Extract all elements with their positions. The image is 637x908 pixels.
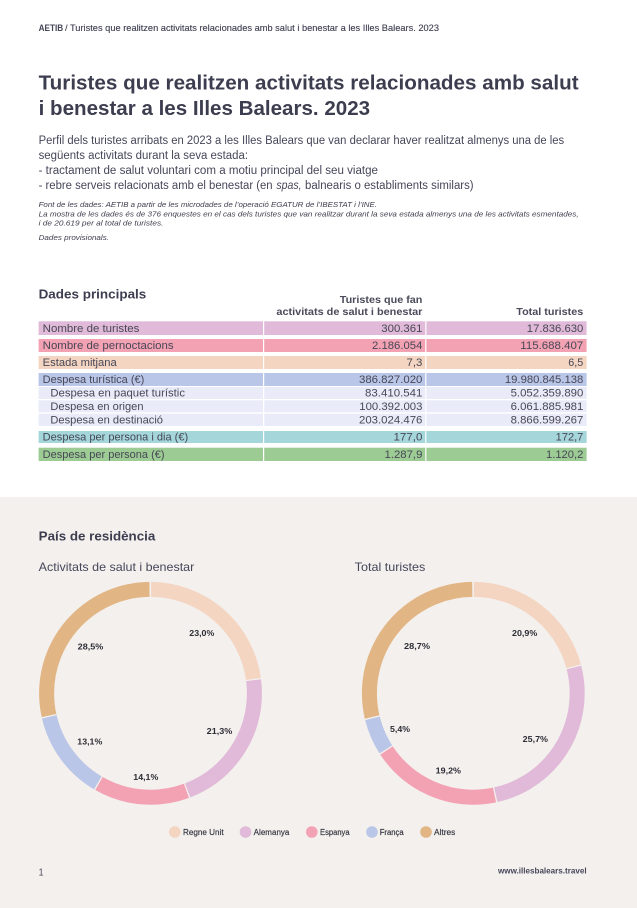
header breadcrumb: AETIB <box>39 23 64 33</box>
table: dades principals <box>39 286 587 461</box>
donut chart: total turistes: 25,7% <box>523 735 549 744</box>
donut chart: activitats de salut i benestar: 14,1% <box>133 773 159 782</box>
row: nombre de pernoctacions: 2.186.054 <box>372 340 422 352</box>
section heading: País de residència <box>39 529 156 544</box>
row: despesa per persona: 1.287,9 <box>384 449 422 461</box>
row: despesa turística: Despesa turística (€) <box>43 374 144 386</box>
intro paragraph: balnearis o establiments similars) <box>305 180 474 192</box>
source note <box>39 200 579 242</box>
row: estada mitjana: 6,5 <box>568 357 583 369</box>
row: despesa turística <box>39 373 587 386</box>
column header: health and wellness tourists: activitats de salut i benestar <box>276 307 422 318</box>
legend <box>169 826 455 838</box>
panel: país de residència <box>0 497 637 908</box>
donut chart: activitats de salut i benestar: 21,3% <box>207 727 233 736</box>
row: despesa en destinació: Despesa en destinació <box>50 415 163 427</box>
row: despesa en origen: 6.061.885.981 <box>511 401 583 413</box>
intro paragraph: - tractament de salut voluntari com a motiu principal del seu viatge <box>39 165 378 177</box>
row: nombre de pernoctacions: Nombre de pernoctacions <box>43 340 174 352</box>
row: despesa en origen: 100.392.003 <box>359 401 423 413</box>
title <box>39 72 579 120</box>
legend: Regne Unit <box>183 828 224 837</box>
row: despesa turística: 19.980.845.138 <box>505 374 583 386</box>
donut chart: activitats de salut i benestar: 23,0% <box>189 629 215 638</box>
intro paragraph: següents activitats durant la seva estada: <box>39 150 248 162</box>
website url: www.illesbalears.travel <box>497 866 587 875</box>
chart title: total turistes: Total turistes <box>355 560 425 574</box>
source note: La mostra de les dades és de 376 enquestes en el cas dels turistes que van realitzar durant la seva estada almenys una de les activitats esmentades, <box>39 209 579 218</box>
row: despesa en paquet turístic: Despesa en paquet turístic <box>50 388 186 400</box>
row: despesa per persona i dia: Despesa per persona i dia (€) <box>43 432 188 444</box>
source note: i de 20.619 per al total de turistes. <box>39 218 163 227</box>
source note: Font de les dades: AETIB a partir de les microdades de l’operació EGATUR de l’IBESTAT i l’INE. <box>39 200 377 209</box>
row: nombre de turistes: 17.836.630 <box>527 323 583 335</box>
donut chart: total turistes: 20,9% <box>512 629 538 638</box>
donut chart: total turistes: 28,7% <box>404 642 431 651</box>
title: Turistes que realitzen activitats relacionades amb salut <box>39 72 579 94</box>
column header: health and wellness tourists: Turistes que fan <box>340 295 422 306</box>
row: despesa turística: 386.827.020 <box>359 374 422 386</box>
intro paragraph: - rebre serveis relacionats amb el benestar (en <box>39 180 273 192</box>
header breadcrumb: / Turistes que realitzen activitats relacionades amb salut i benestar a les Illes Balears. 2023 <box>65 23 439 33</box>
title: i benestar a les Illes Balears. 2023 <box>39 97 370 120</box>
column header: total tourists: Total turistes <box>516 307 584 318</box>
donut chart: activitats de salut i benestar: 28,5% <box>78 642 104 651</box>
donut chart: activitats de salut i benestar: 13,1% <box>77 737 103 746</box>
row: despesa en paquet turístic <box>39 387 587 400</box>
donut chart: total turistes: 19,2% <box>436 766 462 775</box>
row: despesa en destinació: 8.866.599.267 <box>511 415 583 427</box>
row: despesa per persona i dia: 177,0 <box>394 432 422 444</box>
row: despesa en paquet turístic: 83.410.541 <box>365 388 423 400</box>
row: nombre de pernoctacions: 115.688.407 <box>520 340 583 352</box>
intro paragraph <box>39 135 564 192</box>
legend: Espanya <box>320 828 350 837</box>
row: nombre de turistes <box>39 321 587 335</box>
donut chart: activitats de salut i benestar <box>47 589 254 797</box>
row: despesa per persona: 1.120,2 <box>546 449 583 461</box>
row: despesa en destinació <box>39 414 587 427</box>
page number: 1 <box>39 868 44 879</box>
row: estada mitjana <box>39 356 587 369</box>
row: despesa en origen: Despesa en origen <box>50 401 144 413</box>
row: nombre de turistes: 300.361 <box>381 323 422 335</box>
legend: França <box>380 828 404 837</box>
legend: Altres <box>434 828 455 837</box>
row: despesa en origen <box>39 400 587 413</box>
row: despesa per persona: Despesa per persona (€) <box>43 449 165 461</box>
row: despesa en destinació: 203.024.476 <box>359 415 423 427</box>
chart title: activitats de salut i benestar: Activitats de salut i benestar <box>39 560 194 574</box>
intro paragraph: Perfil dels turistes arribats en 2023 a les Illes Balears que van declarar haver realitzat almenys una de les <box>39 135 564 147</box>
row: despesa per persona <box>39 448 587 461</box>
row: nombre de turistes: Nombre de turistes <box>43 323 140 335</box>
source note: Dades provisionals. <box>39 233 109 242</box>
donut chart: total turistes: 5,4% <box>390 725 411 734</box>
intro paragraph: spas, <box>276 180 302 192</box>
row: estada mitjana: Estada mitjana <box>43 357 117 369</box>
row: estada mitjana: 7,3 <box>406 357 422 369</box>
row: despesa per persona i dia <box>39 431 587 444</box>
table heading: Dades principals <box>39 286 146 301</box>
row: nombre de pernoctacions <box>39 339 587 352</box>
row: despesa per persona i dia: 172,7 <box>556 432 583 444</box>
legend: Alemanya <box>254 828 290 837</box>
column header: health and wellness tourists <box>276 295 422 318</box>
donut chart: total turistes <box>369 589 577 797</box>
row: despesa en paquet turístic: 5.052.359.890 <box>511 388 583 400</box>
